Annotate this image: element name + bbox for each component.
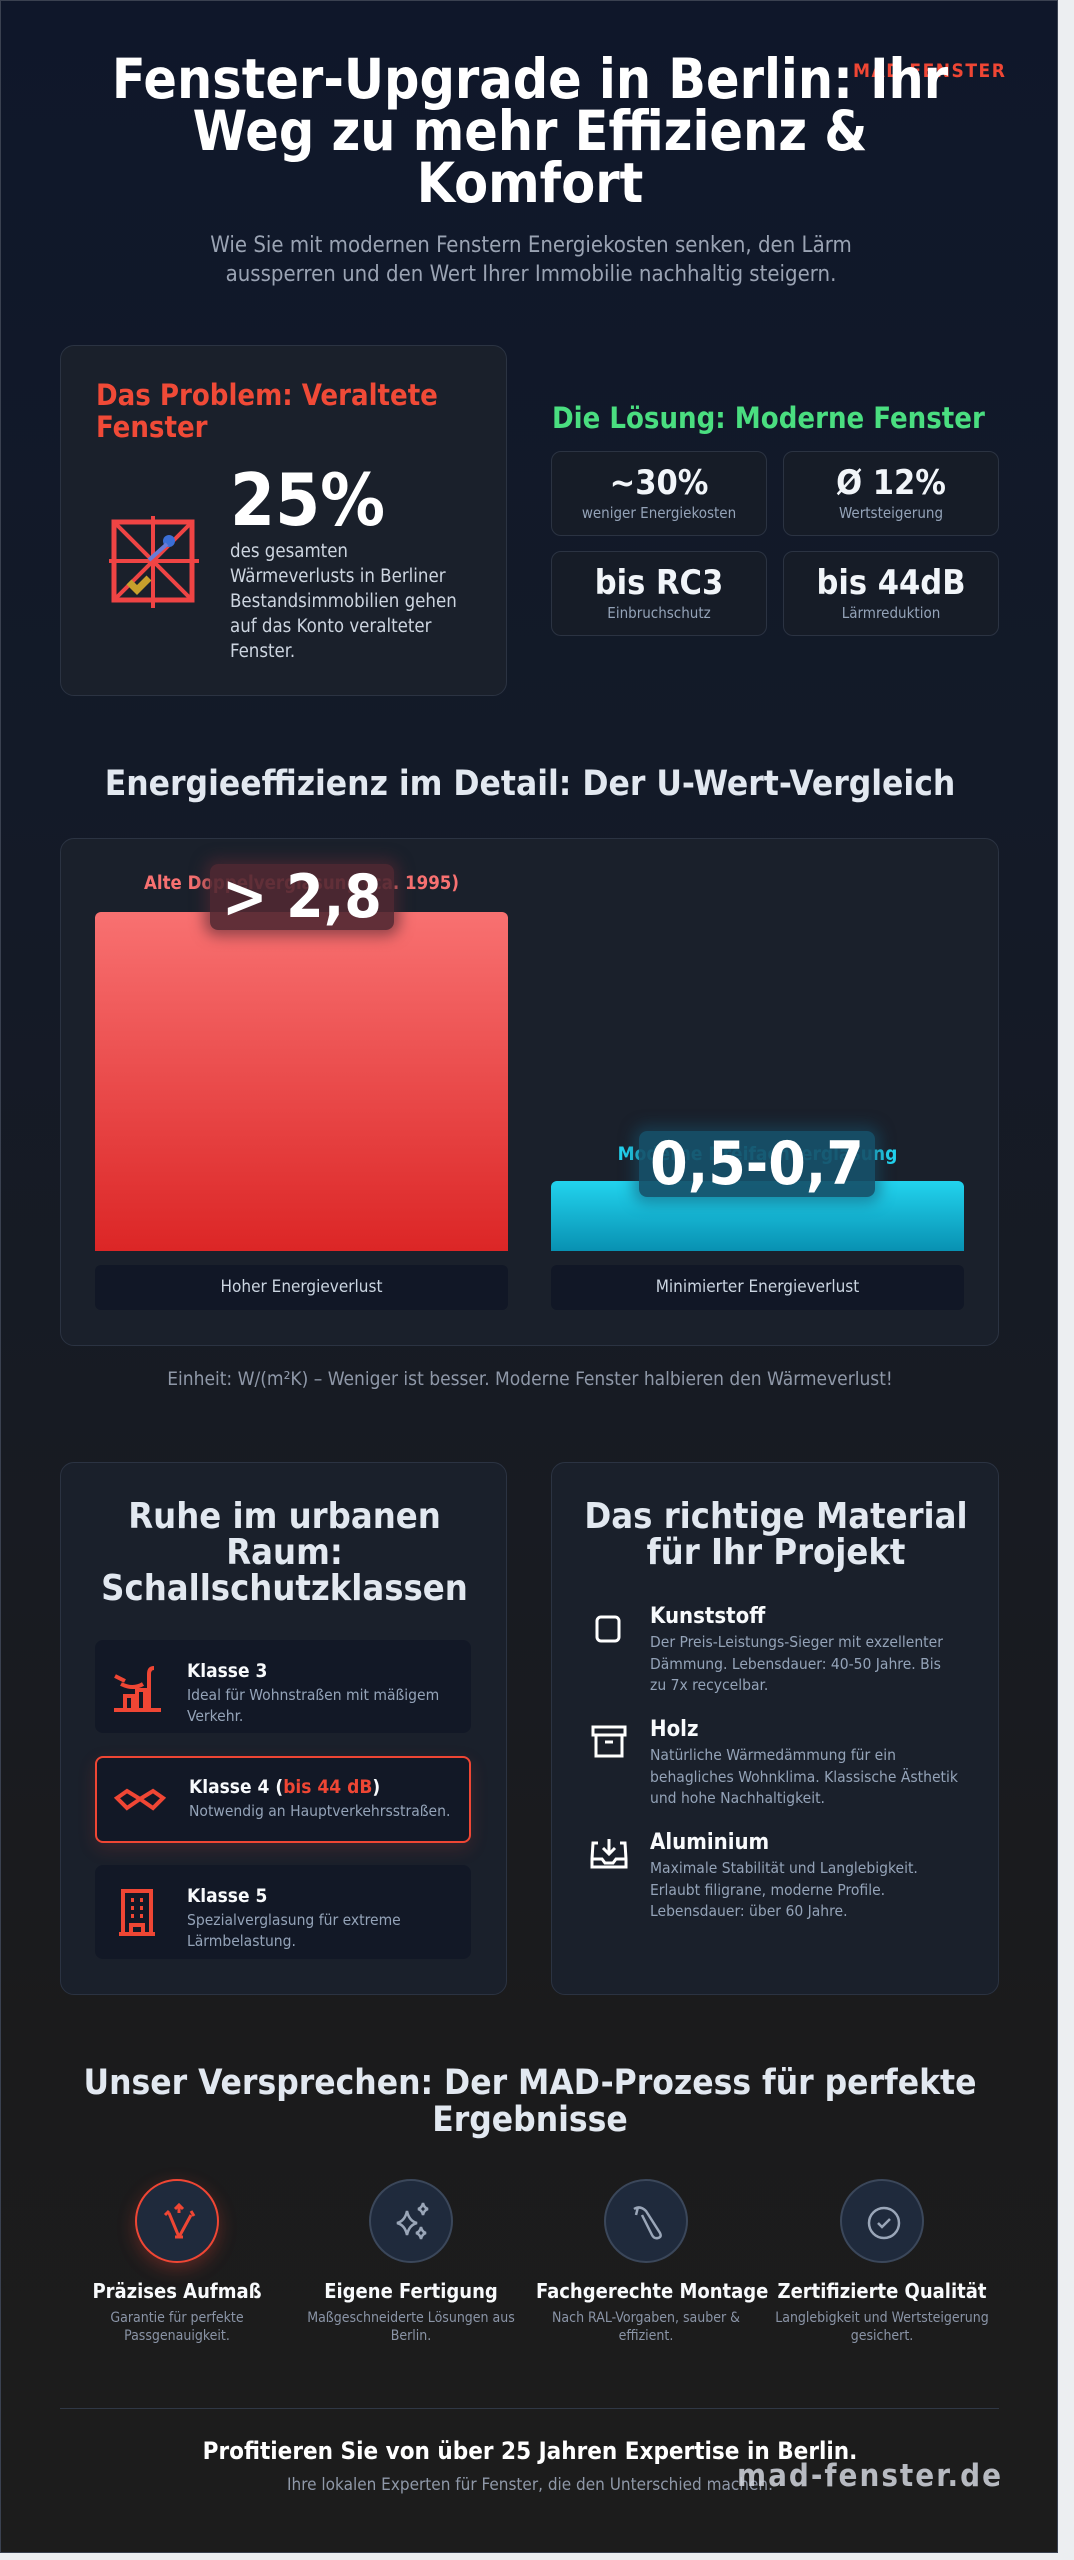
title: Fenster-Upgrade in Berlin: Ihr Weg zu mehr Effizienz & Komfort <box>112 47 948 215</box>
stat: value <box>783 451 999 536</box>
stat: value: Wertsteigerung <box>839 504 943 522</box>
caption new <box>551 1265 964 1310</box>
step: aufmass: Präzises Aufmaß <box>92 2279 262 2303</box>
text: Aluminium <box>650 1830 769 1855</box>
icon: handshake <box>114 1788 166 1811</box>
step: montage: Nach RAL-Vorgaben, sauber & effizient. <box>552 2310 740 2344</box>
stat: noise <box>783 551 999 636</box>
value badge old: > 2,8 <box>222 862 382 932</box>
footer subline: Ihre lokalen Experten für Fenster, die den Unterschied machen. <box>287 2475 773 2495</box>
subtitle: Wie Sie mit modernen Fenstern Energiekosten senken, den Lärm aussperren und den Wert Ihrer Immobilie nachhaltig steigern. <box>210 233 852 287</box>
panel: problem <box>60 345 507 696</box>
text: Maximale Stabilität und Langlebigkeit. Erlaubt filigrane, moderne Profile. Lebensdauer: über 60 Jahre. <box>650 1859 918 1920</box>
label old: Alte Doppelverglasung (ca. 1995) <box>144 873 459 894</box>
stat: energy <box>551 451 767 536</box>
icon: inbox <box>590 1839 628 1868</box>
caption old: Hoher Energieverlust <box>221 1277 382 1297</box>
step: qualitaet: Zertifizierte Qualität <box>778 2279 986 2303</box>
chart note: Einheit: W/(m²K) – Weniger ist besser. Moderne Fenster halbieren den Wärmeverlust! <box>167 1368 893 1390</box>
brand tag: MAD FENSTER <box>853 60 1006 82</box>
item: klasse 4 highlighted: Klasse 4 (bis 44 dB) <box>189 1776 380 1798</box>
stat: value: Ø 12% <box>836 463 946 503</box>
panel: solution <box>551 401 999 636</box>
stat 25%: 25% <box>230 458 385 542</box>
item: klasse 5: Spezialverglasung für extreme Lärmbelastung. <box>187 1911 401 1950</box>
step: aufmass: Garantie für perfekte Passgenauigkeit. <box>110 2310 244 2344</box>
item: klasse 3: Klasse 3 <box>187 1660 267 1682</box>
icon: check circle <box>840 2179 924 2263</box>
step: fertigung: Eigene Fertigung <box>324 2279 498 2303</box>
bar: old <box>95 912 508 1251</box>
icon: box <box>592 1726 626 1758</box>
step: qualitaet <box>775 2179 989 2344</box>
footer url: mad-fenster.de <box>737 2458 1003 2494</box>
material: aluminium <box>590 1830 918 1920</box>
material: holz <box>592 1717 958 1807</box>
stat: security: Einbruchschutz <box>607 604 711 622</box>
stat: energy: ~30% <box>610 463 708 503</box>
panel: noise classes <box>60 1462 507 1995</box>
step: montage <box>536 2179 768 2344</box>
icon: square <box>596 1616 620 1642</box>
icon: street <box>114 1666 161 1712</box>
stat: noise: Lärmreduktion <box>842 604 940 622</box>
materials heading: Das richtige Material für Ihr Projekt <box>584 1496 968 1573</box>
icon: tool <box>604 2179 688 2263</box>
heading: u-value: Energieeffizienz im Detail: Der U-Wert-Vergleich <box>105 764 955 804</box>
value badge new: 0,5-0,7 <box>650 1129 864 1199</box>
item: klasse 5: Klasse 5 <box>187 1885 267 1907</box>
item: klasse 4 highlighted: Notwendig an Hauptverkehrsstraßen. <box>189 1802 450 1820</box>
icon: building <box>119 1889 155 1936</box>
text: Holz <box>650 1717 698 1742</box>
stat: energy: weniger Energiekosten <box>582 504 736 522</box>
step: fertigung: Maßgeschneiderte Lösungen aus Berlin. <box>307 2310 515 2344</box>
problem text: des gesamten Wärmeverlusts in Berliner Bestandsimmobilien gehen auf das Konto veralteter Fenster. <box>230 541 457 662</box>
step: fertigung <box>307 2179 515 2344</box>
panel: u-value chart <box>60 838 999 1346</box>
panel: materials <box>551 1462 999 1995</box>
stat: noise: bis 44dB <box>816 563 966 603</box>
material: kunststoff <box>596 1604 943 1694</box>
bar: new <box>551 1181 964 1251</box>
problem heading: Das Problem: Veraltete Fenster <box>96 378 438 444</box>
item: klasse 5 <box>95 1865 471 1959</box>
item: klasse 4 highlighted <box>95 1756 471 1843</box>
stat: security <box>551 551 767 636</box>
item: klasse 3: Ideal für Wohnstraßen mit mäßigem Verkehr. <box>187 1686 439 1725</box>
solution heading: Die Lösung: Moderne Fenster <box>552 401 985 435</box>
label new: Moderne Dreifachverglasung <box>618 1143 897 1165</box>
icon: broken window <box>109 516 199 608</box>
step: montage: Fachgerechte Montage <box>536 2279 768 2303</box>
step: qualitaet: Langlebigkeit und Wertsteigerung gesichert. <box>775 2310 989 2344</box>
text: Der Preis-Leistungs-Sieger mit exzellenter Dämmung. Lebensdauer: 40-50 Jahre. Bis zu 7x recycelbar. <box>650 1633 943 1694</box>
heading: process: Unser Versprechen: Der MAD-Prozess für perfekte Ergebnisse <box>84 2063 976 2140</box>
text: Kunststoff <box>650 1604 765 1629</box>
item: klasse 3 <box>95 1640 471 1733</box>
step: aufmass <box>92 2176 262 2344</box>
icon: measure <box>135 2179 219 2263</box>
stat: security: bis RC3 <box>595 563 723 603</box>
caption new: Minimierter Energieverlust <box>656 1277 859 1297</box>
text: Natürliche Wärmedämmung für ein behagliches Wohnklima. Klassische Ästhetik und hohe Nachhaltigkeit. <box>650 1746 958 1807</box>
footer claim: Profitieren Sie von über 25 Jahren Expertise in Berlin. <box>203 2437 857 2465</box>
icon: sparkles <box>369 2179 453 2263</box>
caption old <box>95 1265 508 1310</box>
noise heading: Ruhe im urbanen Raum: Schallschutzklassen <box>101 1496 468 1609</box>
